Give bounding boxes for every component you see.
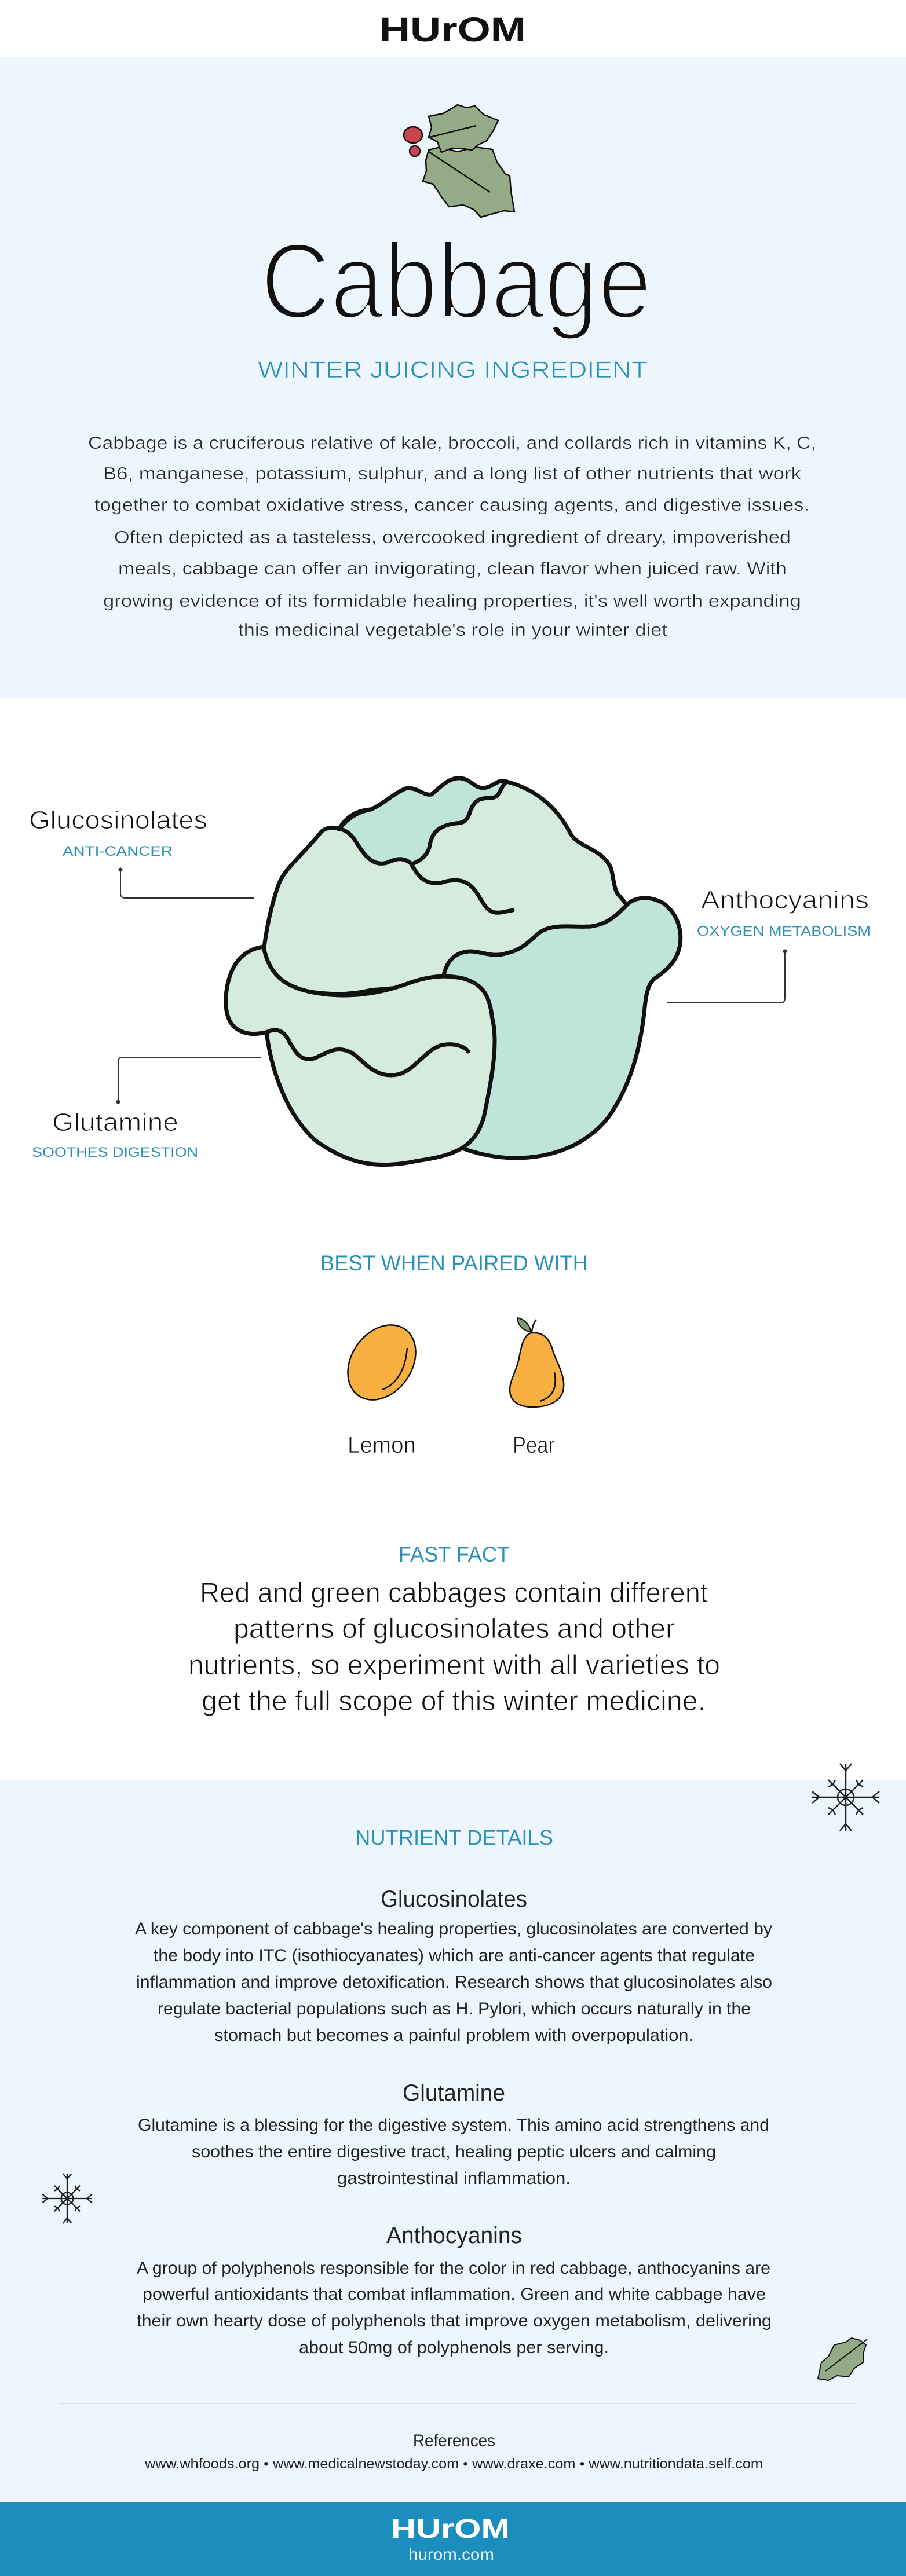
label: anthocyanins: Anthocyanins <box>701 886 869 914</box>
text block: glucosinolates: inflammation and improve detoxification. Research shows that glucosinolates also <box>136 1973 772 1992</box>
text block: glutamine: Glutamine <box>403 2080 505 2106</box>
heading: fast fact: FAST FACT <box>399 1542 510 1566</box>
header bar <box>0 0 906 57</box>
references: References <box>413 2431 495 2450</box>
divider <box>59 2403 858 2404</box>
footer url: hurom.com <box>408 2545 494 2563</box>
heading: nutrient details: NUTRIENT DETAILS <box>355 1826 553 1849</box>
text block: glucosinolates: the body into ITC (isothiocyanates) which are anti-cancer agents that regulate <box>154 1946 755 1965</box>
references <box>144 2431 763 2472</box>
label: glutamine: Glutamine <box>52 1108 178 1137</box>
text block: anthocyanins <box>137 2223 772 2357</box>
text block: glucosinolates: A key component of cabbage's healing properties, glucosinolates are converted by <box>135 1919 772 1939</box>
text block: glutamine: soothes the entire digestive tract, healing peptic ulcers and calming <box>192 2142 716 2161</box>
icon: pear <box>510 1318 564 1458</box>
panel: nutrient details <box>0 1780 906 2502</box>
intro text: Often depicted as a tasteless, overcooked ingredient of dreary, impoverished <box>114 527 791 547</box>
label: glutamine: SOOTHES DIGESTION <box>32 1145 198 1160</box>
label: glucosinolates: Glucosinolates <box>29 806 207 834</box>
cabbage diagram <box>29 776 871 1167</box>
text block: glucosinolates: stomach but becomes a painful problem with overpopulation. <box>214 2026 693 2045</box>
heading: best when paired with: BEST WHEN PAIRED WITH <box>320 1251 588 1275</box>
text block: glucosinolates: Glucosinolates <box>381 1886 527 1912</box>
icon: pear: Pear <box>513 1432 555 1458</box>
text block: anthocyanins: their own hearty dose of polyphenols that improve oxygen metabolism, delivering <box>137 2311 772 2331</box>
fast fact text: Red and green cabbages contain different <box>200 1578 708 1608</box>
fast fact <box>188 1542 720 1717</box>
intro text: Cabbage is a cruciferous relative of kale, broccoli, and collards rich in vitamins K, C, <box>88 433 816 453</box>
label: anthocyanins <box>667 886 871 1003</box>
subtitle: WINTER JUICING INGREDIENT <box>258 357 648 383</box>
fast fact text: get the full scope of this winter medicine. <box>202 1686 706 1717</box>
label: glucosinolates: ANTI-CANCER <box>63 844 173 859</box>
icon: lemon: Lemon <box>348 1432 416 1458</box>
icon: small holly leaf <box>818 2338 867 2380</box>
fast fact text: patterns of glucosinolates and other <box>233 1614 675 1644</box>
icon: snowflake top right <box>812 1763 880 1831</box>
text block: glutamine <box>138 2080 769 2188</box>
text block: anthocyanins: powerful antioxidants that combat inflammation. Green and white cabbage have <box>143 2285 766 2304</box>
label: glutamine <box>32 1057 261 1160</box>
intro text: meals, cabbage can offer an invigorating, clean flavor when juiced raw. With <box>118 558 787 578</box>
intro text: growing evidence of its formidable healing properties, it's well worth expanding <box>103 591 801 611</box>
text block: glucosinolates <box>135 1886 772 2045</box>
intro text: B6, manganese, potassium, sulphur, and a long list of other nutrients that work <box>103 463 802 483</box>
text block: anthocyanins: about 50mg of polyphenols per serving. <box>299 2338 609 2357</box>
pairing section <box>320 1251 588 1458</box>
text block: glutamine: Glutamine is a blessing for the digestive system. This amino acid strengthens and <box>138 2116 769 2135</box>
title: Cabbage <box>261 222 652 341</box>
text block: anthocyanins: Anthocyanins <box>386 2223 522 2248</box>
icon: lemon <box>334 1312 430 1458</box>
label: anthocyanins: OXYGEN METABOLISM <box>697 924 871 939</box>
text block: glutamine: gastrointestinal inflammation. <box>337 2169 571 2188</box>
fast fact text: nutrients, so experiment with all varieties to <box>188 1650 720 1681</box>
intro text: this medicinal vegetable's role in your winter diet <box>238 620 667 640</box>
logo: hurom header: HUrOM <box>379 11 526 49</box>
references: www.whfoods.org • www.medicalnewstoday.com • www.draxe.com • www.nutritiondata.self.com <box>144 2456 763 2472</box>
intro text: together to combat oxidative stress, cancer causing agents, and digestive issues. <box>94 494 809 515</box>
icon: snowflake left <box>42 2173 93 2224</box>
text block: anthocyanins: A group of polyphenols responsible for the color in red cabbage, anthocyanins are <box>137 2259 770 2278</box>
intro text <box>88 433 816 640</box>
intro panel <box>0 57 906 698</box>
cabbage illustration <box>226 778 681 1165</box>
footer <box>0 2502 906 2576</box>
icon: holly <box>404 105 514 217</box>
text block: glucosinolates: regulate bacterial populations such as H. Pylori, which occurs naturally in the <box>158 1999 751 2018</box>
footer logo: HUrOM <box>391 2513 510 2544</box>
label: glucosinolates <box>29 806 254 898</box>
fast fact text <box>188 1578 720 1717</box>
